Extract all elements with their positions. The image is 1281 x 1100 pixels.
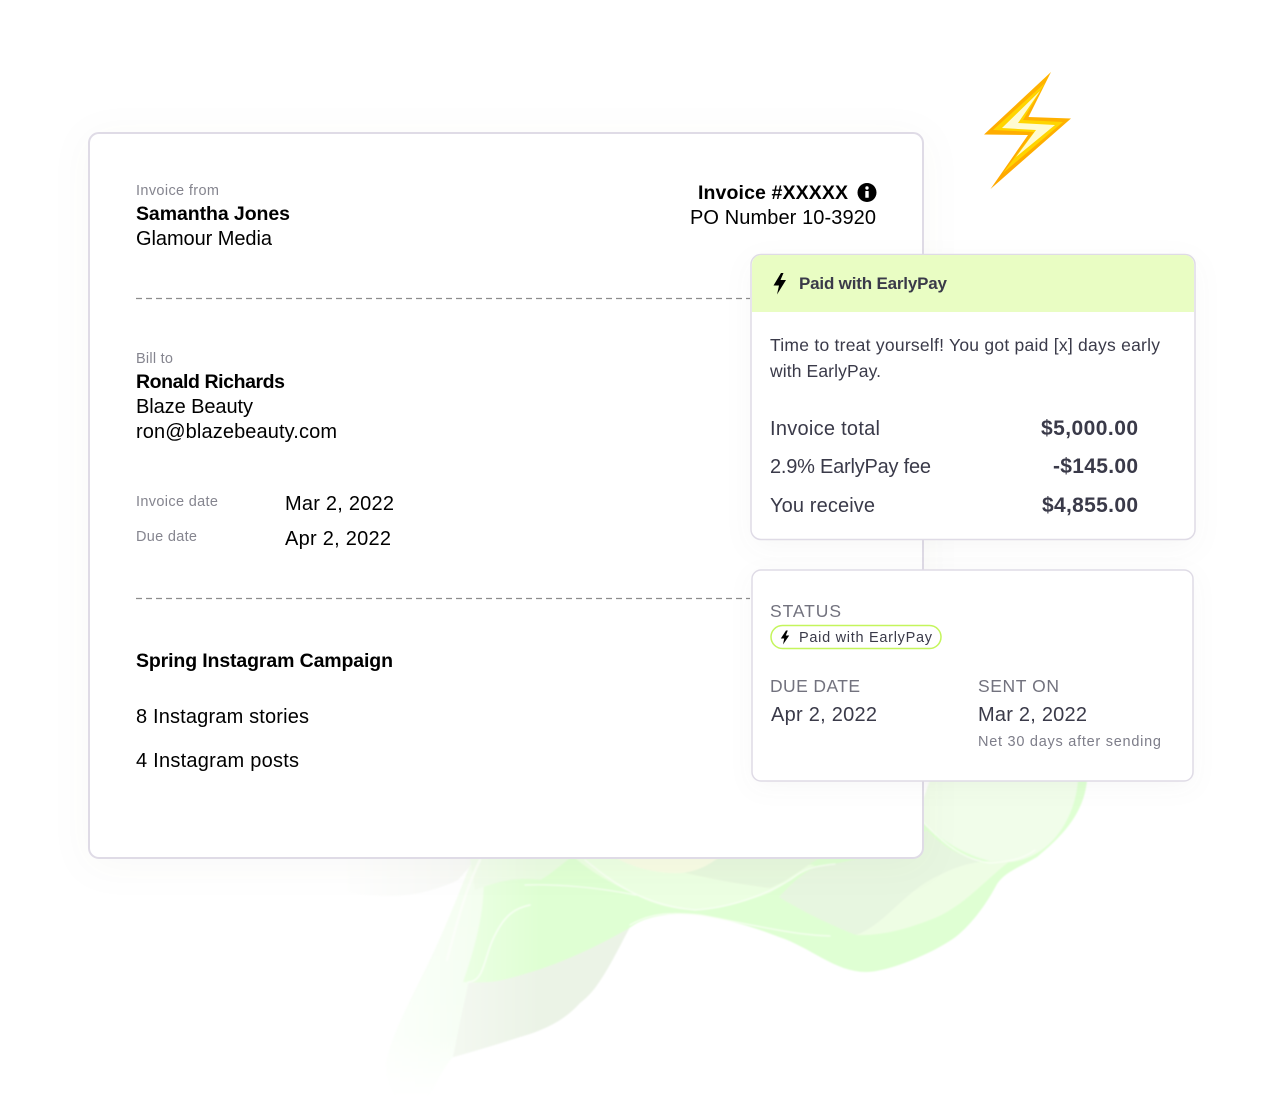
panel background	[752, 570, 1193, 781]
fee breakdown: -$145.00	[1053, 455, 1138, 478]
panel: EarlyPay summary	[751, 254, 1195, 540]
panel header	[752, 255, 1194, 312]
fee breakdown: Invoice total	[770, 418, 880, 440]
dates	[136, 493, 394, 550]
fee breakdown	[770, 417, 1138, 517]
wave: left grey ribbon	[450, 859, 470, 882]
due date: Apr 2, 2022	[771, 704, 877, 726]
fee breakdown: You receive	[770, 495, 875, 517]
fee breakdown: 2.9% EarlyPay fee	[770, 456, 931, 478]
card background	[89, 133, 923, 858]
wave: main green body	[463, 780, 1087, 982]
sender block: Invoice from	[136, 183, 219, 199]
invoice number: PO Number 10-3920	[690, 207, 876, 229]
bill to block: Bill to	[136, 351, 173, 367]
wave: centre ribbon	[575, 858, 815, 910]
background wave	[427, 782, 1088, 1056]
line items: 8 Instagram stories	[136, 706, 309, 728]
dates: Apr 2, 2022	[285, 528, 391, 550]
line items: Spring Instagram Campaign	[136, 650, 393, 672]
bill to block: ron@blazebeauty.com	[136, 421, 337, 443]
bill to block: Ronald Richards	[136, 371, 285, 393]
dates: Due date	[136, 529, 197, 545]
due date	[770, 676, 877, 726]
dates: Invoice date	[136, 494, 218, 510]
invoice card	[89, 133, 923, 858]
line items: 4 Instagram posts	[136, 750, 299, 772]
wave: pale yellow bump	[618, 859, 716, 872]
invoice number: Invoice #XXXXX	[698, 182, 848, 204]
panel: status	[752, 570, 1193, 781]
fee breakdown: $4,855.00	[1042, 494, 1138, 517]
message	[769, 335, 1160, 381]
wave: lower right bright band	[856, 861, 1010, 935]
wave: pale left strip	[386, 858, 510, 1100]
sender block	[136, 183, 290, 250]
sent on	[978, 676, 1161, 750]
sender block: Samantha Jones	[136, 203, 290, 225]
sent on: SENT ON	[978, 676, 1059, 696]
wave: right hatched band	[779, 830, 983, 935]
bill to block	[136, 351, 337, 443]
wave: lower grey ribbon	[450, 925, 631, 1058]
icon: lightning bolt	[984, 72, 1071, 189]
dates: Mar 2, 2022	[285, 493, 394, 515]
header label: Paid with EarlyPay	[799, 274, 948, 293]
wave: bright streaks	[447, 822, 1035, 982]
bill to block: Blaze Beauty	[136, 396, 253, 418]
fee breakdown: $5,000.00	[1041, 417, 1138, 440]
sent on: Net 30 days after sending	[978, 734, 1161, 750]
due date: DUE DATE	[770, 676, 860, 696]
icon: info	[858, 183, 876, 202]
line items	[136, 650, 393, 772]
sender block: Glamour Media	[136, 228, 273, 250]
wave: top right pale band	[923, 780, 1078, 862]
wave: upper left pale patch	[482, 859, 568, 886]
wave: centre hatch	[757, 860, 816, 864]
icon: small bolt	[774, 273, 786, 294]
status pill: Paid with EarlyPay	[799, 630, 933, 646]
invoice number	[690, 182, 876, 229]
panel background	[751, 254, 1195, 540]
sent on: Mar 2, 2022	[978, 704, 1087, 726]
status pill	[771, 626, 941, 648]
message: with EarlyPay.	[769, 361, 881, 381]
status label: STATUS	[770, 601, 841, 621]
message: Time to treat yourself! You got paid [x] days early	[770, 335, 1160, 355]
